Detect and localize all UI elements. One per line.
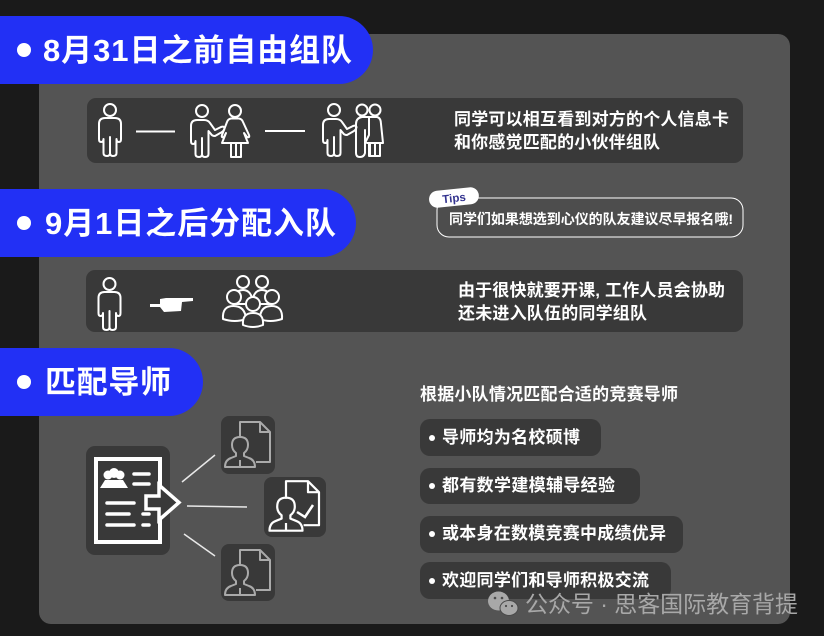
list item: mentor competition record: 或本身在数模竞赛中成绩优异 (442, 523, 666, 543)
heading: step 1 (0, 16, 373, 84)
arrow: connector two (265, 130, 305, 132)
text: step 1 description: 和你感觉匹配的小伙伴组队 (454, 132, 660, 152)
panel: step 2 row (86, 270, 743, 332)
heading: step 2 (0, 189, 356, 257)
heading: step 3: 匹配导师 (45, 365, 171, 400)
icon: mentor candidate one (221, 416, 275, 474)
arrow: connector one (136, 130, 175, 132)
watermark: 公众号 · 思客国际教育背提 (525, 591, 798, 617)
icon: student and team (323, 104, 383, 157)
text: step 1 description: 同学可以相互看到对方的个人信息卡 (454, 109, 729, 129)
list item: mentor degree (420, 419, 601, 456)
tips badge: Tips (442, 192, 466, 206)
icon: mentor candidate two (221, 544, 275, 601)
callout: tips (428, 186, 743, 237)
list item: mentor communication (420, 562, 671, 599)
callout: tips: 同学们如果想选到心仪的队友建议尽早报名哦! (449, 211, 733, 227)
icon: single student (98, 278, 120, 330)
text: step 1 description (454, 109, 729, 152)
arrow: document to mentors (146, 485, 179, 520)
list item: mentor experience: 都有数学建模辅导经验 (442, 475, 615, 495)
list item: mentor degree: 导师均为名校硕博 (442, 427, 580, 447)
text: step 2 description: 还未进入队伍的同学组队 (458, 303, 647, 323)
list item: mentor competition record (420, 516, 683, 553)
icon: mentor selected (264, 477, 326, 537)
heading: step 3 (0, 348, 203, 416)
icon: team profile document (86, 446, 179, 555)
text: step 2 description (458, 280, 725, 323)
text: step 2 description: 由于很快就要开课, 工作人员会协助 (458, 280, 725, 300)
text: mentor intro: 根据小队情况匹配合适的竞赛导师 (420, 384, 678, 404)
heading: step 2: 9月1日之后分配入队 (45, 206, 336, 241)
icon: single student (99, 104, 121, 156)
heading: step 1: 8月31日之前自由组队 (43, 33, 352, 68)
icon: group of people (223, 276, 282, 327)
icon: student pair (191, 105, 249, 157)
icon: pointing hand (150, 298, 193, 312)
list item: mentor communication: 欢迎同学们和导师积极交流 (442, 570, 649, 590)
panel: step 1 row (87, 98, 743, 163)
tips badge (428, 186, 480, 209)
icon: wechat (488, 592, 518, 616)
arrows: connector lines (182, 455, 247, 556)
list item: mentor experience (420, 468, 640, 504)
